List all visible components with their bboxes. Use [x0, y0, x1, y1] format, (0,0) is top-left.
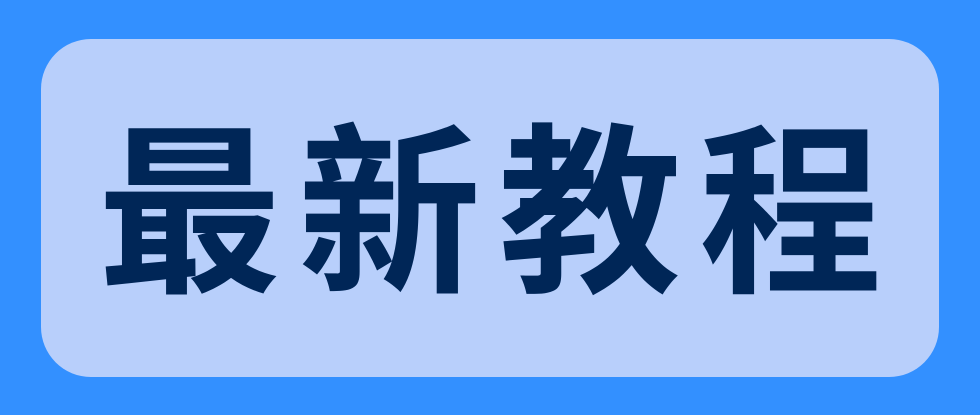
title: 最 — [98, 112, 281, 317]
title: 程 — [699, 112, 882, 317]
title: 新 — [298, 112, 481, 317]
title — [98, 112, 882, 317]
title: 教 — [498, 112, 682, 317]
panel: rounded card — [41, 39, 939, 377]
